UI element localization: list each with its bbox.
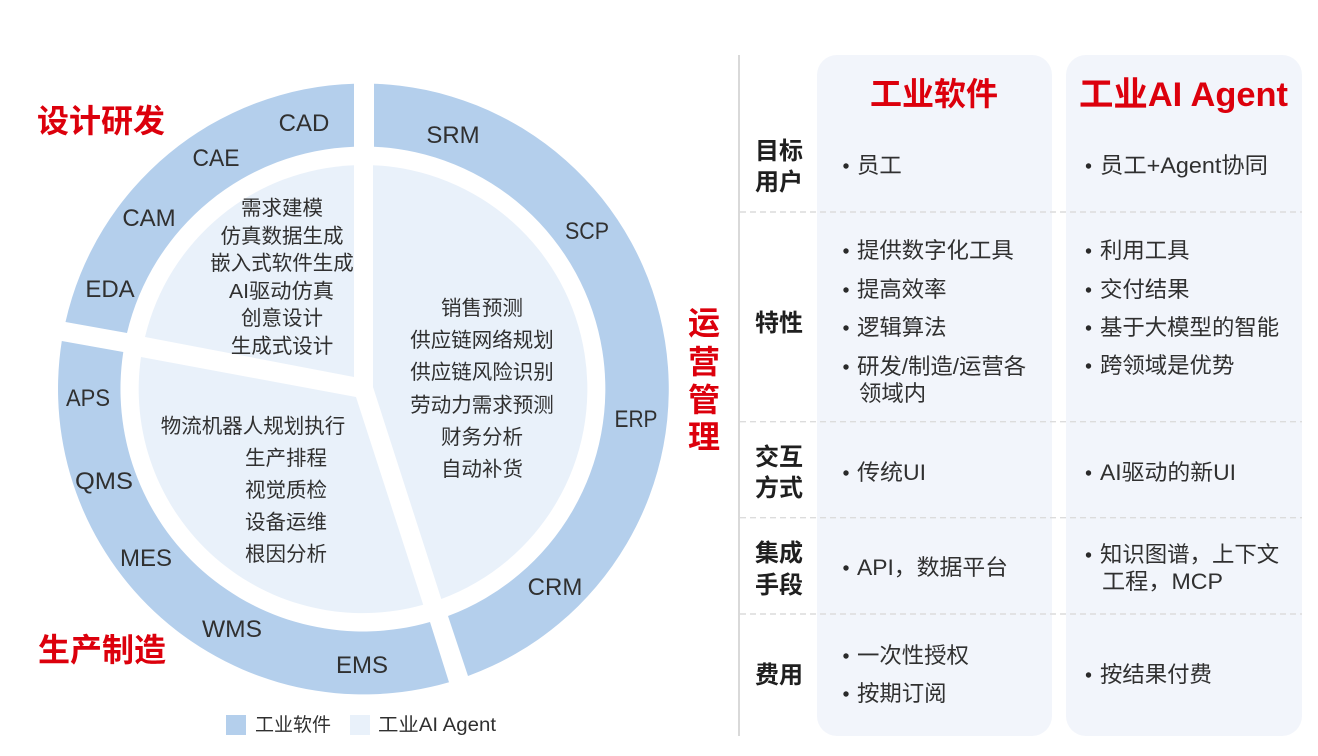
text block: operations agent uses: 供应链网络规划 <box>410 329 554 352</box>
list: agent integration: 知识图谱，上下文 <box>1100 542 1279 567</box>
list: software target users: 员工 <box>857 153 902 178</box>
row label: target users <box>755 138 803 196</box>
list: agent characteristics: 利用工具 <box>1100 238 1190 263</box>
text block: production agent uses: 设备运维 <box>245 511 327 534</box>
list: agent characteristics <box>1086 238 1279 378</box>
row label: integration: 集成 <box>755 540 803 567</box>
heading: operations <box>688 305 720 455</box>
text block: design agent uses: AI驱动仿真 <box>229 280 334 303</box>
heading: operations: 营 <box>688 344 720 380</box>
row label: target users: 用户 <box>755 169 803 196</box>
ring segment: production <box>58 341 449 694</box>
list: agent characteristics: 基于大模型的智能 <box>1100 315 1279 340</box>
list: software characteristics: 研发/制造/运营各 <box>857 354 1026 379</box>
legend: 工业AI Agent <box>378 714 497 736</box>
list: agent target users: 员工+Agent协同 <box>1100 153 1268 178</box>
list: software interaction: 传统UI <box>857 460 926 485</box>
ring labels: software types: MES <box>120 545 172 572</box>
list: agent interaction: AI驱动的新UI <box>1100 460 1236 485</box>
list: software cost <box>843 643 969 706</box>
ring labels: software types: CRM <box>528 574 582 601</box>
row label: interaction <box>755 443 803 502</box>
list: software cost: 一次性授权 <box>857 643 969 668</box>
panel: industrial software column <box>817 55 1052 736</box>
legend: 工业软件 <box>255 714 331 736</box>
list: agent cost: 按结果付费 <box>1100 662 1212 687</box>
list: agent integration <box>1086 542 1279 594</box>
text block: operations agent uses: 劳动力需求预测 <box>410 394 554 417</box>
row label: interaction: 方式 <box>755 474 803 502</box>
text block: production agent uses: 生产排程 <box>245 447 327 470</box>
text block: design agent uses: 创意设计 <box>241 307 323 330</box>
heading: production: 生产制造 <box>38 632 166 668</box>
text block: production agent uses: 物流机器人规划执行 <box>161 415 345 438</box>
ring labels: software types <box>66 110 658 679</box>
list: software characteristics: 提供数字化工具 <box>857 238 1014 263</box>
ring labels: software types: APS <box>66 385 110 412</box>
ring labels: software types: WMS <box>202 616 262 643</box>
wedge: operations agent <box>373 165 587 599</box>
ring labels: software types: CAE <box>192 145 240 172</box>
heading: operations: 管 <box>688 382 720 418</box>
column heading: industrial software: 工业软件 <box>870 76 998 112</box>
text block: production agent uses: 视觉质检 <box>245 479 327 502</box>
text block: production agent uses: 根因分析 <box>245 543 327 566</box>
wedge: production agent <box>139 357 423 613</box>
column heading: industrial AI agent: 工业AI Agent <box>1079 76 1288 114</box>
list: software cost: 按期订阅 <box>857 681 947 706</box>
text block: operations agent uses: 销售预测 <box>441 297 523 320</box>
list: agent characteristics: 跨领域是优势 <box>1100 353 1234 378</box>
list: software integration: API，数据平台 <box>857 555 1008 580</box>
heading: operations: 运 <box>688 305 720 341</box>
heading: operations: 理 <box>688 419 720 455</box>
list: software characteristics: 逻辑算法 <box>857 315 947 340</box>
ring segment: design and R&D <box>66 84 354 333</box>
row label: characteristics: 特性 <box>755 310 803 337</box>
ring labels: software types: ERP <box>614 406 658 433</box>
ring labels: software types: EDA <box>85 276 135 303</box>
row label: integration <box>755 540 803 599</box>
text block: production agent uses <box>161 415 345 566</box>
ring labels: software types: CAD <box>279 110 329 137</box>
row label: integration: 手段 <box>755 571 803 599</box>
text block: operations agent uses <box>410 297 554 481</box>
vertical divider <box>738 55 740 736</box>
list: agent characteristics: 交付结果 <box>1100 277 1190 302</box>
row label: cost: 费用 <box>755 662 803 689</box>
list: agent integration: 工程，MCP <box>1102 569 1223 594</box>
ring labels: software types: SRM <box>426 122 480 149</box>
heading: design and R&D: 设计研发 <box>37 103 165 139</box>
ring labels: software types: QMS <box>75 468 133 495</box>
text block: design agent uses: 嵌入式软件生成 <box>210 252 354 275</box>
ring labels: software types: EMS <box>336 652 388 679</box>
text block: design agent uses <box>210 197 354 358</box>
list: software characteristics: 领域内 <box>859 381 926 406</box>
pie chart: industrial software ring and AI agent wedges <box>58 84 669 694</box>
text block: operations agent uses: 自动补货 <box>441 458 523 481</box>
row label: interaction: 交互 <box>755 443 803 471</box>
text block: operations agent uses: 财务分析 <box>441 426 523 449</box>
row label: target users: 目标 <box>755 138 803 165</box>
wedge: design and R&D agent <box>145 165 354 377</box>
list: software characteristics <box>843 238 1026 406</box>
text block: design agent uses: 仿真数据生成 <box>220 225 344 248</box>
ring labels: software types: SCP <box>565 218 609 245</box>
text block: operations agent uses: 供应链风险识别 <box>410 361 554 384</box>
legend <box>226 714 497 736</box>
text block: design agent uses: 需求建模 <box>241 197 323 220</box>
panel: industrial AI agent column <box>1066 55 1302 736</box>
ring segment: operations <box>374 84 669 676</box>
list: software characteristics: 提高效率 <box>857 277 947 302</box>
ring labels: software types: CAM <box>122 205 176 232</box>
text block: design agent uses: 生成式设计 <box>231 335 333 358</box>
